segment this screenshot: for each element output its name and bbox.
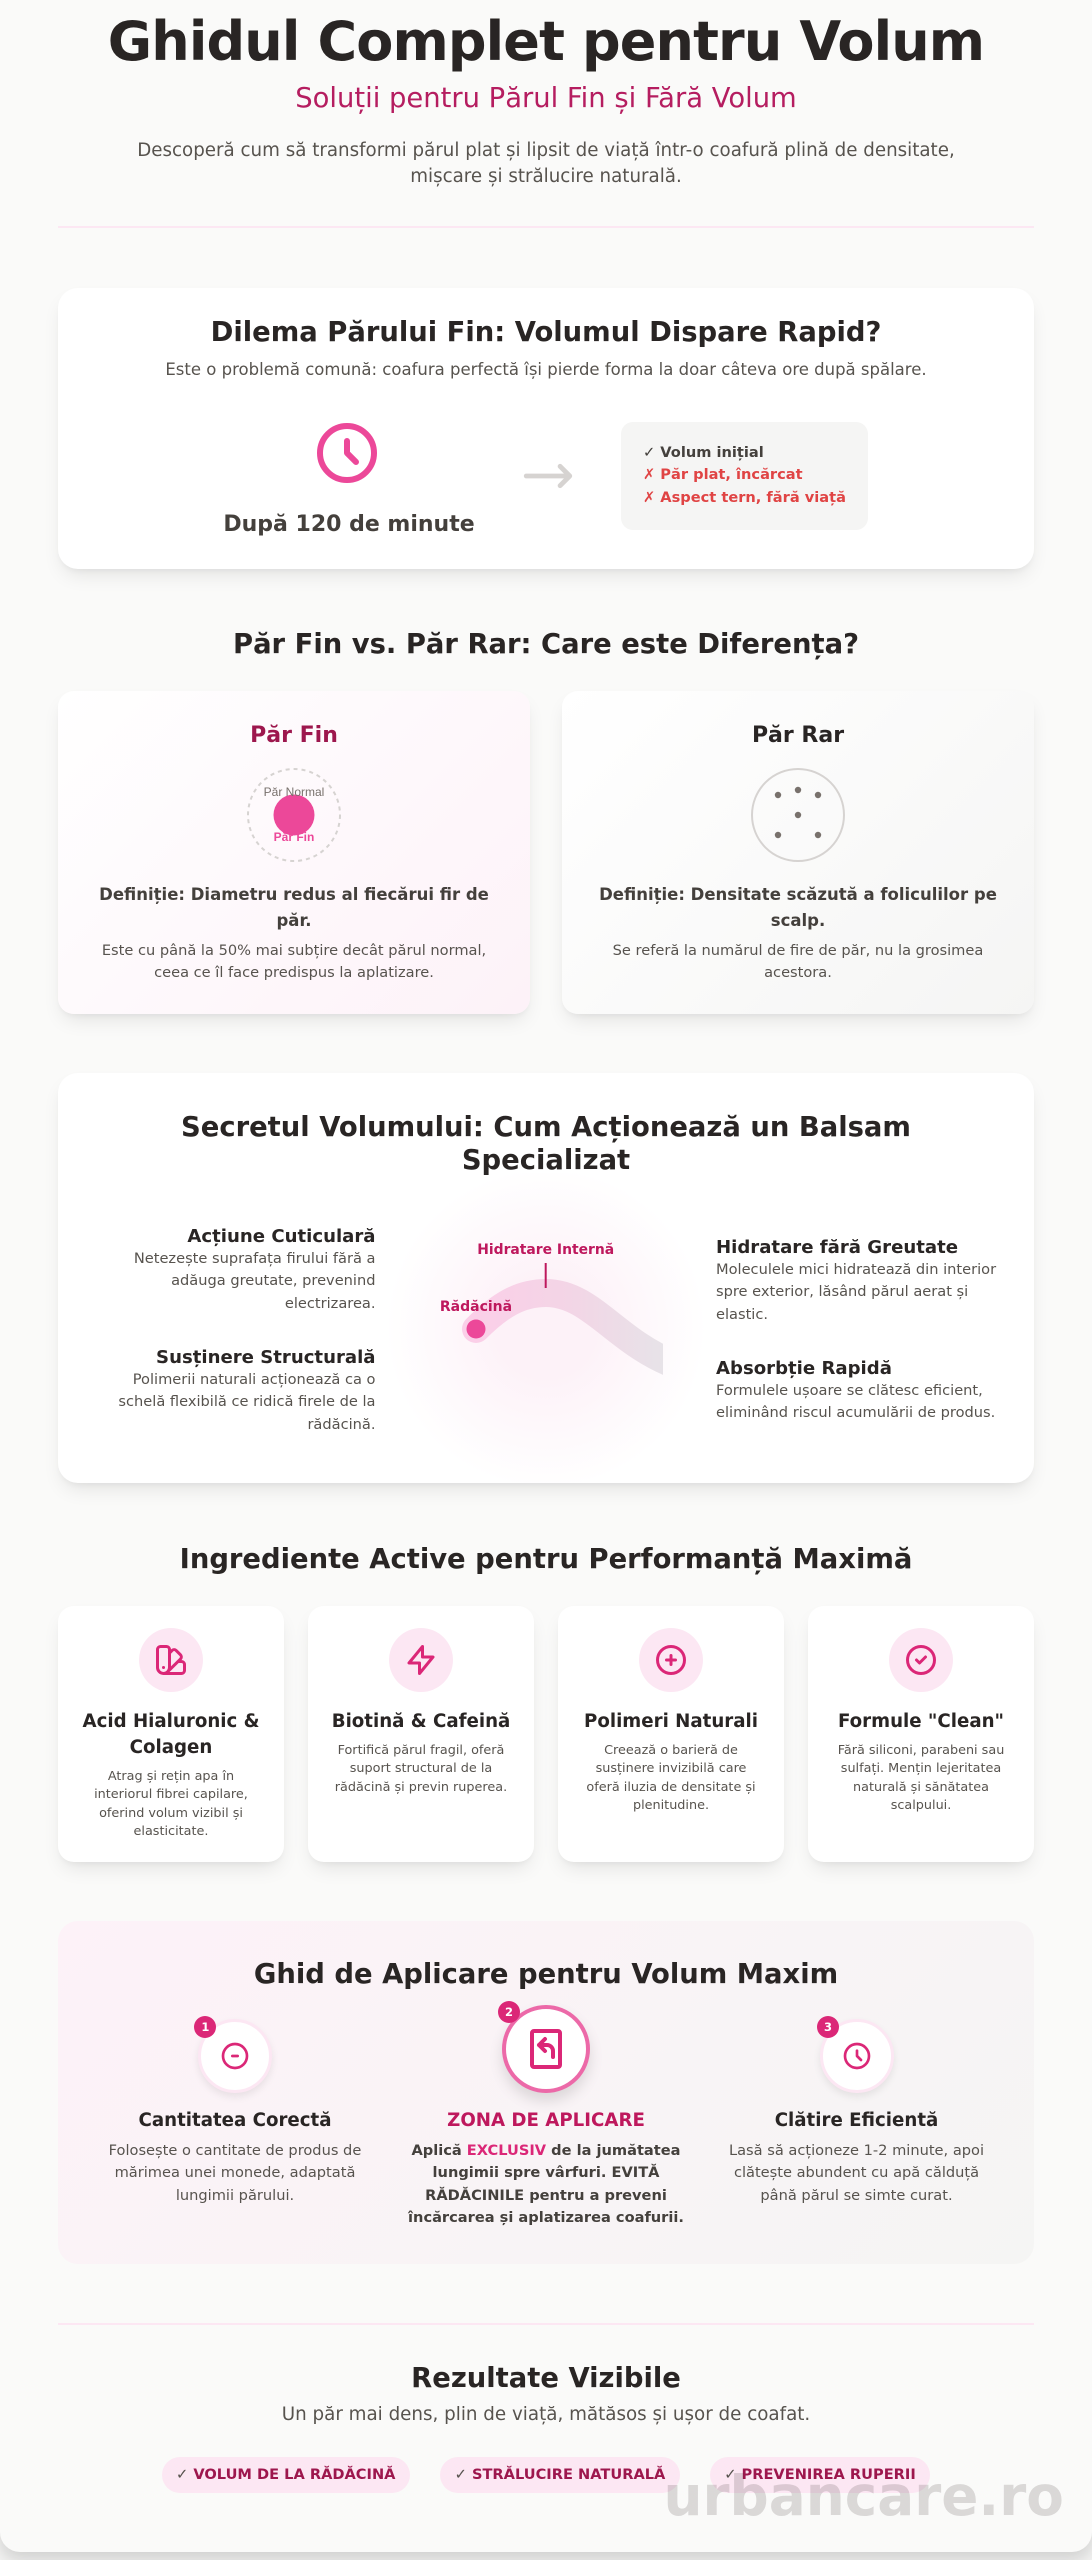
watermark: urbancare.ro <box>664 2464 1064 2528</box>
text: par rar: acestora. <box>764 964 832 981</box>
text: naturală și sănătatea <box>853 1780 989 1795</box>
heading: guide: Ghid de Aplicare pentru Volum Maxim <box>254 1958 838 1990</box>
text: results: Un păr mai dens, plin de viață, mătăsos și ușor de coafat. <box>282 2404 810 2425</box>
icon: clock <box>317 423 377 483</box>
text: până părul se simte curat. <box>760 2187 953 2204</box>
text: par rar <box>613 942 983 981</box>
intro text: Descoperă cum să transformi părul plat și lipsit de viață într-o coafură plină de densitate, <box>137 140 955 161</box>
icon: minus circle <box>198 2019 272 2093</box>
text: Lasă să acționeze 1-2 minute, apoi <box>729 2142 984 2159</box>
text: mărimea unei monede, adaptată <box>115 2164 355 2181</box>
text <box>109 2142 361 2204</box>
text: par rar: Se referă la numărul de fire de păr, nu la grosimea <box>613 942 983 959</box>
badge 3: 3 <box>824 2020 832 2034</box>
panel: polimeri <box>558 1606 784 1862</box>
intro text: mișcare și strălucire naturală. <box>410 166 682 187</box>
step 3 <box>729 2016 984 2204</box>
diagram: hair strand: Rădăcină <box>440 1299 512 1315</box>
step 2 <box>408 2001 684 2226</box>
badge 1: 1 <box>201 2020 209 2034</box>
text: rădăcină și previn ruperea. <box>335 1780 507 1795</box>
icon: clock <box>820 2019 894 2093</box>
definition: par fin <box>99 884 489 930</box>
diagram: hair strand: Hidratare Internă <box>477 1242 614 1258</box>
text: Fără siliconi, parabeni sau <box>838 1743 1004 1758</box>
pill: stralucire <box>440 2457 680 2493</box>
text: par fin <box>102 942 486 981</box>
result box: ✗ Aspect tern, fără viață <box>643 489 846 506</box>
panel: par rar <box>562 691 1034 1014</box>
icon: plus circle <box>639 1628 703 1692</box>
pill: volum: ✓ VOLUM DE LA RĂDĂCINĂ <box>176 2466 395 2483</box>
text: par fin: Este cu până la 50% mai subțire decât părul normal, <box>102 942 486 959</box>
title: Formule "Clean" <box>838 1711 1004 1732</box>
text: dilema description: Este o problemă comună: coafura perfectă își pierde forma la doar câteva ore după spălare. <box>165 360 927 379</box>
text <box>729 2142 984 2204</box>
title: Biotină & Cafeină <box>332 1711 510 1732</box>
text <box>335 1743 507 1795</box>
title: ZONA DE APLICARE <box>447 2110 645 2131</box>
pill: volum <box>162 2457 410 2493</box>
intro text <box>137 140 955 187</box>
text: interiorul fibrei capilare, <box>94 1787 248 1802</box>
icon: bolt <box>389 1628 453 1692</box>
diagram: sparse hair <box>751 768 845 862</box>
panel: clean <box>808 1606 1034 1862</box>
text: sulfați. Mențin lejeritatea <box>841 1761 1001 1776</box>
text <box>408 2142 684 2226</box>
text: Atrag și rețin apa în <box>108 1769 234 1784</box>
text: Folosește o cantitate de produs de <box>109 2142 361 2159</box>
definition: par fin: Definiție: Diametru redus al fiecărui fir de <box>99 884 489 904</box>
point: sustinere structurala <box>118 1347 376 1433</box>
badge 1 <box>194 2016 216 2038</box>
point: absorbtie: Absorbție Rapidă <box>716 1358 892 1379</box>
title: Cantitatea Corectă <box>138 2110 332 2131</box>
point: absorbtie: Formulele ușoare se clătesc eficient, <box>716 1382 983 1399</box>
definition: par fin: păr. <box>276 910 312 930</box>
subtitle: Soluții pentru Părul Fin și Fără Volum <box>295 83 797 114</box>
definition: par rar: scalp. <box>771 910 825 930</box>
panel: application guide <box>58 1921 1034 2264</box>
point: actiune cuticulara: Netezește suprafața firului fără a <box>134 1250 376 1267</box>
point: absorbtie: eliminând riscul acumulării de produs. <box>716 1404 995 1421</box>
heading: secret: Secretul Volumului: Cum Acționează un Balsam <box>181 1112 911 1142</box>
point: actiune cuticulara: Acțiune Cuticulară <box>187 1226 376 1247</box>
panel: acid hialuronic <box>58 1606 284 1862</box>
panel: dilema <box>58 288 1034 569</box>
icon: arrow <box>524 464 572 488</box>
diagram: fine hair <box>247 768 341 862</box>
panel: par fin <box>58 691 530 1014</box>
heading: results: Rezultate Vizibile <box>411 2363 681 2394</box>
pill: prevenire <box>710 2457 930 2493</box>
text: lungimii spre vârfuri. EVITĂ <box>433 2164 659 2181</box>
text: încărcarea și aplatizarea coafurii. <box>408 2209 684 2226</box>
heading: comparison: Păr Fin vs. Păr Rar: Care este Diferența? <box>233 628 859 660</box>
title: Colagen <box>130 1737 212 1758</box>
point: hidratare: Moleculele mici hidratează din interior <box>716 1261 996 1278</box>
text <box>586 1743 756 1813</box>
heading: secret: Specializat <box>462 1144 630 1176</box>
text: lungimii părului. <box>176 2187 294 2204</box>
text: Creează o barieră de <box>604 1743 738 1758</box>
text: par fin: ceea ce îl face predispus la aplatizare. <box>154 964 434 981</box>
result box <box>621 422 868 530</box>
heading: par rar: Păr Rar <box>752 723 844 748</box>
text: clătește abundent cu apă călduță <box>734 2164 979 2181</box>
label: after 120 minutes: După 120 de minute <box>223 512 475 537</box>
point: hidratare: elastic. <box>716 1306 768 1323</box>
icon: reply document <box>502 2005 590 2093</box>
text: Fortifică părul fragil, oferă <box>338 1743 504 1758</box>
icon: swatch <box>139 1628 203 1692</box>
title <box>82 1711 259 1758</box>
text: susținere invizibilă care <box>596 1761 746 1776</box>
diagram: fine hair: Păr Normal <box>264 785 324 799</box>
heading: secret <box>181 1112 911 1176</box>
diagram: hair strand <box>441 1237 663 1418</box>
heading: par fin: Păr Fin <box>250 723 338 748</box>
point: sustinere structurala: schelă flexibilă ce ridică firele de la <box>118 1393 376 1410</box>
definition: par rar <box>599 884 997 930</box>
title: Polimeri Naturali <box>584 1711 758 1732</box>
point: sustinere structurala: Susținere Structurală <box>156 1347 376 1368</box>
panel: secret <box>58 1073 1034 1483</box>
result box: ✓ Volum inițial <box>643 444 764 461</box>
point: absorbtie <box>716 1358 995 1421</box>
heading: dilema: Dilema Părului Fin: Volumul Dispare Rapid? <box>211 317 881 348</box>
text: scalpului. <box>891 1798 951 1813</box>
point: hidratare: spre exterior, lăsând părul aerat și <box>716 1283 968 1300</box>
result box: ✗ Păr plat, încărcat <box>643 466 803 483</box>
point: hidratare: Hidratare fără Greutate <box>716 1237 958 1258</box>
text <box>838 1743 1004 1813</box>
title: Acid Hialuronic & <box>82 1711 259 1732</box>
point: actiune cuticulara: adăuga greutate, prevenind <box>171 1272 376 1289</box>
badge 3 <box>817 2016 839 2038</box>
title: Clătire Eficientă <box>775 2110 938 2131</box>
pill: prevenire: ✓ PREVENIREA RUPERII <box>724 2466 916 2483</box>
definition: par rar: Definiție: Densitate scăzută a foliculilor pe <box>599 884 997 904</box>
step 1 <box>109 2016 361 2204</box>
point: sustinere structurala: rădăcină. <box>307 1416 376 1433</box>
text: elasticitate. <box>134 1824 208 1839</box>
text: Aplică EXCLUSIV de la jumătatea <box>411 2142 681 2159</box>
text <box>94 1769 248 1839</box>
point: actiune cuticulara <box>134 1226 376 1312</box>
heading: ingredients: Ingrediente Active pentru Performanță Maximă <box>180 1544 912 1574</box>
title: Ghidul Complet pentru Volum <box>108 10 984 73</box>
text: oferă iluzia de densitate și <box>586 1780 756 1795</box>
point: sustinere structurala: Polimerii naturali acționează ca o <box>133 1371 376 1388</box>
point: actiune cuticulara: electrizarea. <box>285 1295 376 1312</box>
text: plenitudine. <box>633 1798 709 1813</box>
diagram: fine hair: Păr Fin <box>274 830 314 844</box>
icon: check circle <box>889 1628 953 1692</box>
badge 2: 2 <box>505 2005 513 2019</box>
text: RĂDĂCINILE pentru a preveni <box>425 2187 667 2204</box>
point: hidratare <box>716 1237 996 1323</box>
pill: stralucire: ✓ STRĂLUCIRE NATURALĂ <box>455 2466 665 2483</box>
text: suport structural de la <box>350 1761 492 1776</box>
panel: biotina <box>308 1606 534 1862</box>
text: oferind volum vizibil și <box>99 1806 243 1821</box>
badge 2 <box>498 2001 520 2023</box>
